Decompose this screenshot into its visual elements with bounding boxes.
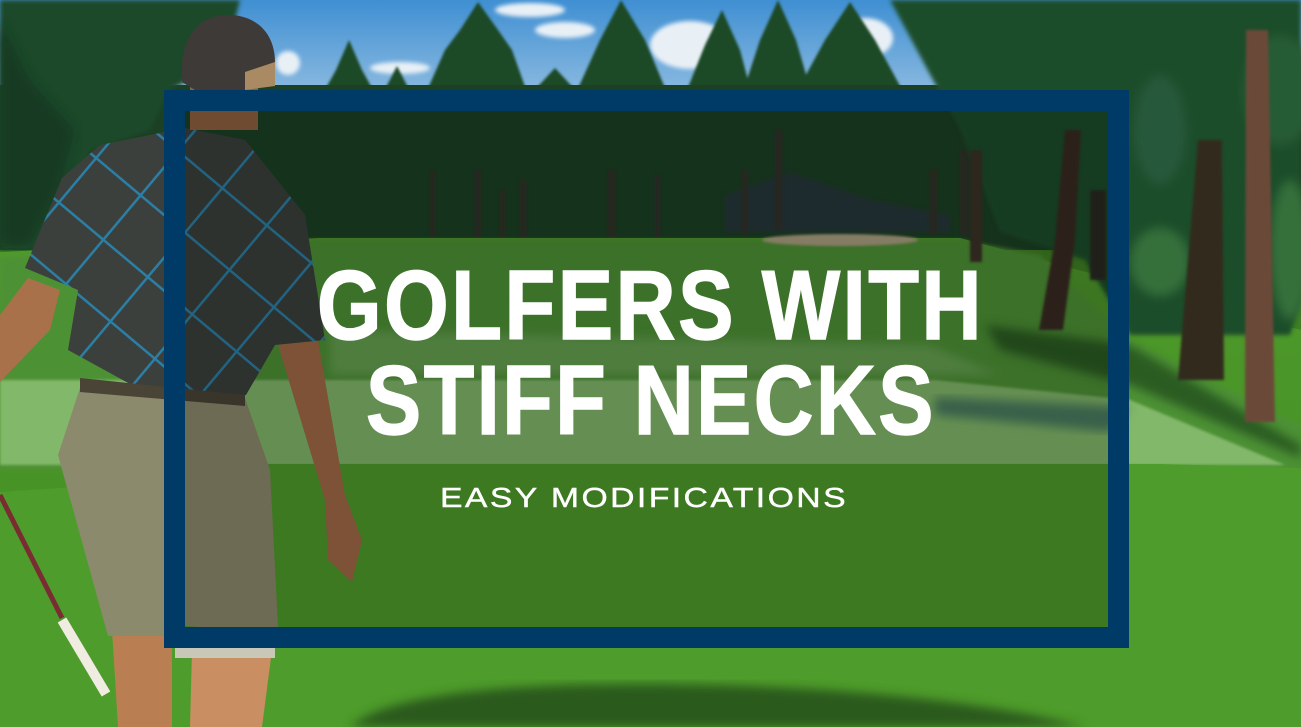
neck [190, 85, 258, 130]
golfer [0, 15, 362, 727]
legs [112, 630, 172, 727]
foreground grass [0, 464, 1301, 727]
ground shadow [350, 684, 1085, 727]
headband [245, 62, 275, 90]
main grass [0, 238, 1301, 727]
shadow under trees [985, 325, 1301, 458]
shorts [58, 388, 278, 636]
golf club [0, 495, 62, 618]
dark overlay inside frame [185, 111, 1108, 627]
distant pine tops [322, 0, 905, 95]
large trunks [970, 30, 1275, 422]
right lighter foliage [1130, 35, 1301, 320]
right dark pines [890, 0, 1301, 335]
sky [0, 0, 1301, 130]
right arm [278, 340, 362, 582]
darker pine at far left [0, 20, 75, 245]
distant trunks [430, 130, 968, 245]
clouds [276, 3, 893, 75]
distant tree line [0, 85, 1301, 250]
light tee box [0, 380, 1285, 465]
fairway light bands [330, 330, 1000, 375]
title [317, 250, 984, 455]
left dark pines [0, 0, 240, 250]
far fairway [0, 240, 1301, 470]
belt [80, 378, 245, 406]
subtitle: EASY MODIFICATIONS [440, 482, 848, 513]
title line 1: GOLFERS WITH [317, 250, 984, 360]
shorts hem [175, 647, 275, 658]
tee box shade [935, 397, 1130, 432]
frame [174, 100, 1118, 638]
shirt [25, 128, 325, 395]
left arm [0, 278, 60, 382]
sand bunker [762, 234, 918, 246]
house in trees [725, 172, 950, 232]
title line 2: STIFF NECKS [366, 345, 936, 455]
hair [182, 15, 275, 90]
